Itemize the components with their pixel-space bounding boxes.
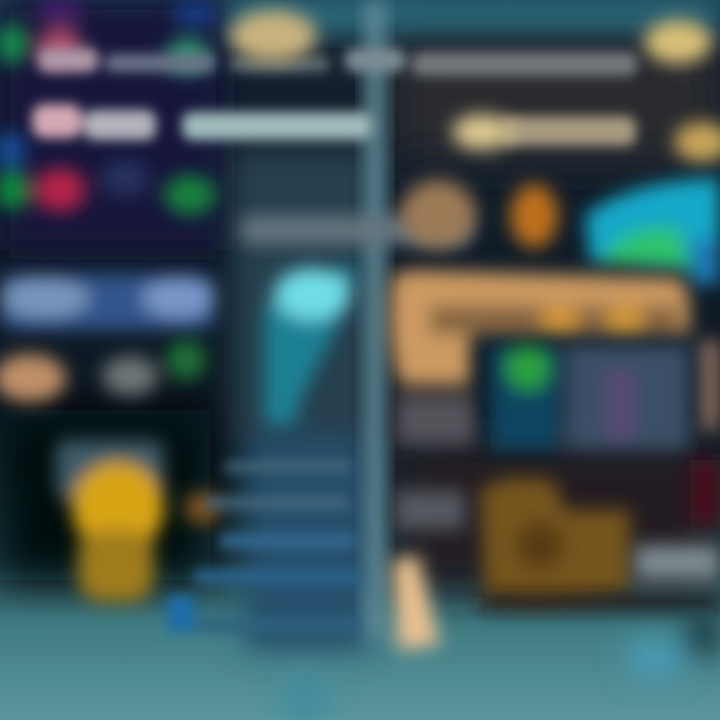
floor details: [285, 615, 720, 720]
orange frame panel: [390, 270, 720, 445]
icons row right: [400, 180, 558, 248]
bar chart panel: [490, 345, 690, 450]
document lines center: [168, 462, 360, 632]
gold folder: [480, 478, 630, 603]
left blue band: [0, 274, 215, 330]
cyan center arrow: [265, 262, 355, 425]
teal green chart top right: [585, 178, 720, 285]
top text rows: [32, 48, 637, 146]
glowing peach stripe: [392, 555, 440, 650]
top left colored dots grid: [0, 0, 217, 215]
vertical light strip: [365, 0, 385, 640]
warm highlights top: [229, 10, 720, 162]
right lower panels: [395, 460, 720, 609]
center column panel: [232, 150, 372, 650]
gold coins: [56, 440, 220, 602]
left lower row icons: [0, 340, 206, 402]
middle heading band: [240, 216, 470, 244]
